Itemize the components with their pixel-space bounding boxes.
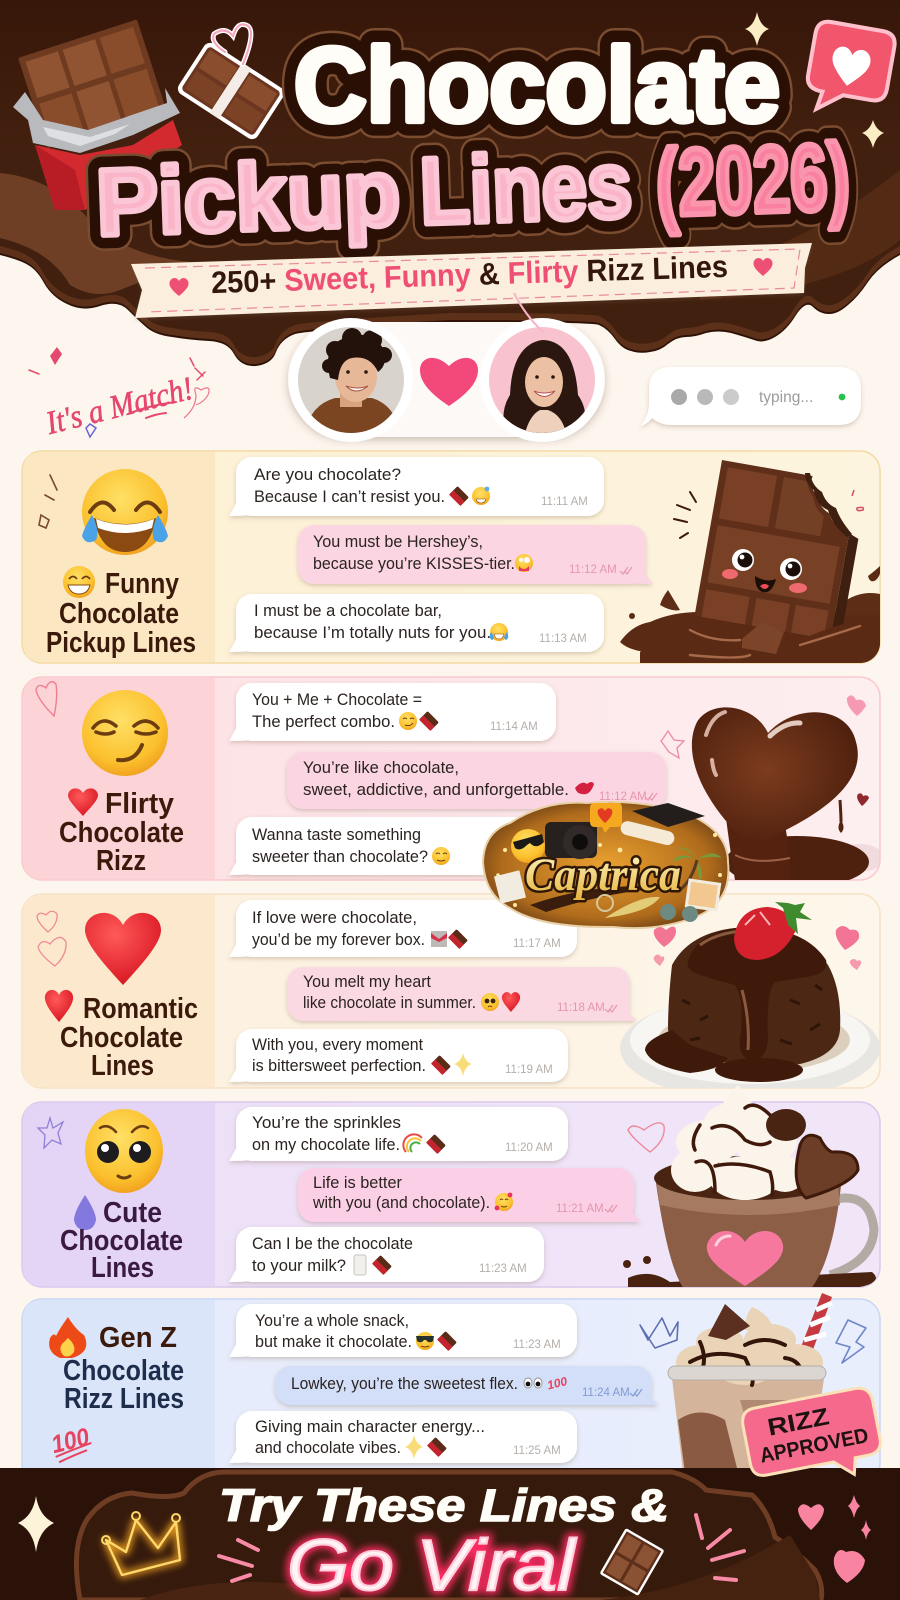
icon: sparkle left xyxy=(18,1496,54,1552)
message 7 text: If love were chocolate, xyxy=(252,909,417,927)
message 1 text: Because I can’t resist you. xyxy=(254,488,445,506)
chat bubble: message 1 xyxy=(229,457,604,516)
doodle marks xyxy=(39,475,57,528)
heading: Try These Lines &: Try These Lines & xyxy=(219,1480,669,1531)
badge speckles xyxy=(496,833,722,907)
heading: flirty: Rizz xyxy=(96,845,146,877)
message 10 text: You’re the sprinkles xyxy=(252,1114,401,1132)
icon: pleading emoji xyxy=(85,1109,163,1193)
message 7 text: 11:17 AM xyxy=(513,938,561,950)
callout: RIZZ APPROVED badge: APPROVED xyxy=(758,1424,870,1468)
heading: flirty: Flirty xyxy=(105,788,174,820)
illustration: chocolate bar with face xyxy=(620,460,880,665)
icon: badge heart bubble xyxy=(590,803,622,833)
chat bubble: message 7 xyxy=(229,900,577,957)
message 9 text: is bittersweet perfection. xyxy=(252,1057,426,1075)
icon: badge palm xyxy=(672,848,722,890)
heading: cute xyxy=(60,1197,183,1284)
doodle: crown xyxy=(640,1318,678,1348)
icon: badge scroll xyxy=(619,820,676,847)
message 2 text xyxy=(313,533,632,576)
panel: captrica badge xyxy=(483,802,728,928)
message 15 text xyxy=(255,1418,561,1459)
title: Pickup Lines (2026): Pickup xyxy=(94,140,402,255)
message 11 text: Life is better xyxy=(313,1174,403,1192)
footer xyxy=(0,1468,900,1600)
icon: laughing small xyxy=(63,566,95,598)
message 8 text xyxy=(303,973,617,1014)
heading: gen z xyxy=(63,1322,184,1415)
neon rays xyxy=(219,1515,744,1581)
message 2 text: because you’re KISSES-tier. xyxy=(313,555,515,573)
message 6 text: Wanna taste something xyxy=(252,826,421,844)
doodle: right sparks xyxy=(852,490,863,511)
illustration: chocolate shake xyxy=(668,1293,832,1480)
chat bubble: message 12 xyxy=(229,1227,544,1282)
panel: cute xyxy=(22,1085,880,1290)
message 14 text xyxy=(291,1374,642,1399)
icon: banner heart right xyxy=(753,258,773,276)
message 14 text: 100 xyxy=(546,1374,569,1392)
message 10 text: 11:20 AM xyxy=(505,1142,553,1154)
banner: subtitle ribbon xyxy=(131,243,812,318)
title: Pickup Lines (2026): Lines xyxy=(418,131,634,244)
typing indicator bubble xyxy=(640,367,861,426)
icon: purple drop xyxy=(74,1195,96,1230)
title: Chocolate: Chocolate xyxy=(294,27,780,144)
message 3 text: 11:13 AM xyxy=(539,633,587,645)
message 12 text: 11:23 AM xyxy=(479,1263,527,1275)
title: Pickup Lines (2026): Pickup xyxy=(94,140,402,255)
title: Chocolate: Chocolate xyxy=(294,27,780,144)
badge polaroids xyxy=(494,870,720,910)
doodle: lightning bolt xyxy=(836,1320,866,1363)
doodle: star xyxy=(38,1118,63,1148)
swoosh under logo xyxy=(530,886,680,912)
chat bubble: message 11 xyxy=(298,1168,640,1222)
icon: pink hearts and sparkles xyxy=(798,1495,871,1583)
doodles: hearts and star xyxy=(661,695,869,806)
subtitle text: 250+ Sweet, Funny & Flirty Rizz Lines xyxy=(211,249,728,300)
message 3 text xyxy=(254,602,587,645)
chat bubble: message 15 xyxy=(229,1411,577,1463)
message 1 text: Are you chocolate? xyxy=(254,466,401,484)
icon: big red heart xyxy=(85,913,161,985)
panel: romantic xyxy=(22,894,880,1100)
title: Pickup Lines (2026): Lines xyxy=(418,131,634,244)
title: Pickup Lines (2026): Lines xyxy=(418,131,634,244)
doodle: outline heart xyxy=(628,1123,664,1152)
message 6 text xyxy=(252,826,450,866)
match pill with avatars xyxy=(288,293,605,442)
message 13 text: but make it chocolate. xyxy=(255,1333,412,1351)
message 4 text: 11:14 AM xyxy=(490,721,538,733)
icon: banner heart left xyxy=(169,278,189,296)
message 4 text: You + Me + Chocolate = xyxy=(252,691,422,709)
heading: funny: Funny xyxy=(105,568,179,600)
heading: romantic: Romantic xyxy=(83,993,198,1025)
message 13 text: 11:23 AM xyxy=(513,1339,561,1351)
message 15 text: and chocolate vibes. xyxy=(255,1439,401,1457)
message 15 text: 11:25 AM xyxy=(513,1445,561,1457)
message 3 text: because I’m totally nuts for you. xyxy=(254,624,491,642)
message 7 text xyxy=(252,909,561,950)
illustration: lava cake on plate xyxy=(620,902,880,1100)
heading: cute: Cute xyxy=(103,1197,162,1229)
message 5 text: sweet, addictive, and unforgettable. xyxy=(303,781,569,799)
heading: cute: Lines xyxy=(91,1252,154,1284)
message 9 text xyxy=(252,1036,553,1076)
heading: flirty xyxy=(59,788,184,877)
logo: Captrica: Captrica xyxy=(525,849,681,901)
icon: mini chocolate bar xyxy=(599,1528,665,1596)
heading: romantic xyxy=(60,993,198,1082)
doodle: outline hearts xyxy=(37,911,66,966)
message 1 text xyxy=(254,466,588,508)
heading: romantic: Lines xyxy=(91,1050,154,1082)
icon: neon crown xyxy=(102,1512,180,1575)
callout: RIZZ APPROVED badge: RIZZ xyxy=(765,1403,831,1442)
chat bubble: message 3 xyxy=(229,594,604,652)
heading: romantic: Chocolate xyxy=(60,1022,183,1054)
message 6 text: sweeter than chocolate? xyxy=(252,848,428,866)
message 4 text xyxy=(252,691,538,733)
pink string xyxy=(514,293,543,332)
message 5 text: You’re like chocolate, xyxy=(303,759,459,777)
icon: small wrapped chocolate with heart xyxy=(175,24,287,142)
icon: chocolate bar in red wrapper xyxy=(13,19,182,210)
heading: gen z: Rizz Lines xyxy=(64,1383,184,1415)
message 13 text: You’re a whole snack, xyxy=(255,1312,409,1330)
heading: funny xyxy=(46,568,196,659)
chat bubble: message 5 xyxy=(287,752,666,809)
message 14 text: 11:24 AM xyxy=(582,1387,630,1399)
heading: gen z: Chocolate xyxy=(63,1355,184,1387)
heading: gen z: Gen Z xyxy=(99,1322,177,1354)
message 10 text: on my chocolate life. xyxy=(252,1136,400,1154)
chat bubble: message 4 xyxy=(229,683,556,741)
panel: flirty xyxy=(22,677,884,888)
icon: badge camera xyxy=(545,822,597,859)
message 13 text xyxy=(255,1312,561,1351)
chat bubble: message 14 xyxy=(275,1366,658,1405)
message 11 text: with you (and chocolate). xyxy=(312,1194,490,1212)
icon: speech bubble with heart xyxy=(803,20,897,120)
icon: red heart small xyxy=(68,788,98,816)
message 7 text: you’d be my forever box. xyxy=(252,931,425,949)
icon: laughing emoji xyxy=(82,469,168,555)
chat bubble: message 10 xyxy=(229,1107,568,1161)
header: melting chocolate xyxy=(0,0,900,366)
message 8 text: 11:18 AM xyxy=(557,1002,605,1014)
title: Pickup Lines (2026) xyxy=(94,124,852,255)
heading: flirty: Chocolate xyxy=(59,817,184,849)
illustration: melting chocolate heart xyxy=(692,707,884,888)
message 12 text xyxy=(252,1235,527,1275)
icon: hundred points: 100 xyxy=(48,1423,92,1459)
message 8 text: You melt my heart xyxy=(303,973,431,991)
illustration: hot chocolate mug xyxy=(623,1085,876,1290)
icon: badge sunglasses emoji xyxy=(511,829,545,863)
heading: cute: Chocolate xyxy=(60,1225,183,1257)
chat bubble: message 13 xyxy=(229,1304,577,1357)
message 3 text: I must be a chocolate bar, xyxy=(254,602,442,620)
icon: red heart small xyxy=(45,990,73,1022)
typing indicator bubble: typing... xyxy=(759,389,813,406)
title: Pickup Lines (2026): Pickup xyxy=(94,140,402,255)
icon: fire xyxy=(49,1317,86,1358)
doodles: pink hearts xyxy=(654,926,861,970)
doodle: outline heart xyxy=(36,682,57,716)
doodle: It's a Match!: It's a Match! xyxy=(42,371,197,442)
message 8 text: like chocolate in summer. xyxy=(303,994,476,1012)
icon: smirking emoji xyxy=(82,690,168,776)
feather and glasses xyxy=(597,895,698,922)
message 1 text: 11:11 AM xyxy=(541,496,588,508)
message 11 text: 11:21 AM xyxy=(556,1203,604,1215)
panel: funny xyxy=(22,451,880,665)
message 15 text: Giving main character energy... xyxy=(255,1418,485,1436)
heading: funny: Pickup Lines xyxy=(46,627,196,659)
message 5 text: 11:12 AM xyxy=(599,791,647,803)
message 14 text: Lowkey, you’re the sweetest flex. xyxy=(291,1375,518,1393)
callout: RIZZ APPROVED badge xyxy=(740,1386,886,1493)
panel: gen z xyxy=(22,1293,880,1484)
chat bubble: message 9 xyxy=(229,1029,568,1082)
title: Chocolate: Chocolate xyxy=(294,27,780,144)
message 11 text xyxy=(312,1174,617,1215)
message 9 text: 11:19 AM xyxy=(505,1064,553,1076)
message 10 text xyxy=(252,1114,553,1154)
message 9 text: With you, every moment xyxy=(252,1036,423,1054)
chat bubble: message 2 xyxy=(298,525,653,584)
message 2 text: You must be Hershey’s, xyxy=(313,533,483,551)
message 12 text: to your milk? xyxy=(252,1257,346,1275)
message 5 text xyxy=(303,759,657,803)
icon: match heart xyxy=(420,358,478,406)
icon: sparkles xyxy=(745,12,884,148)
chat bubble: message 6 xyxy=(229,817,566,875)
message 4 text: The perfect combo. xyxy=(252,713,395,731)
message 12 text: Can I be the chocolate xyxy=(252,1235,413,1253)
icon: badge graduation cap xyxy=(632,803,705,827)
chat bubble: message 8 xyxy=(287,967,636,1021)
heading: funny: Chocolate xyxy=(59,598,179,630)
avatar: woman xyxy=(489,327,595,433)
message 2 text: 11:12 AM xyxy=(569,564,617,576)
avatar: man xyxy=(298,327,404,433)
